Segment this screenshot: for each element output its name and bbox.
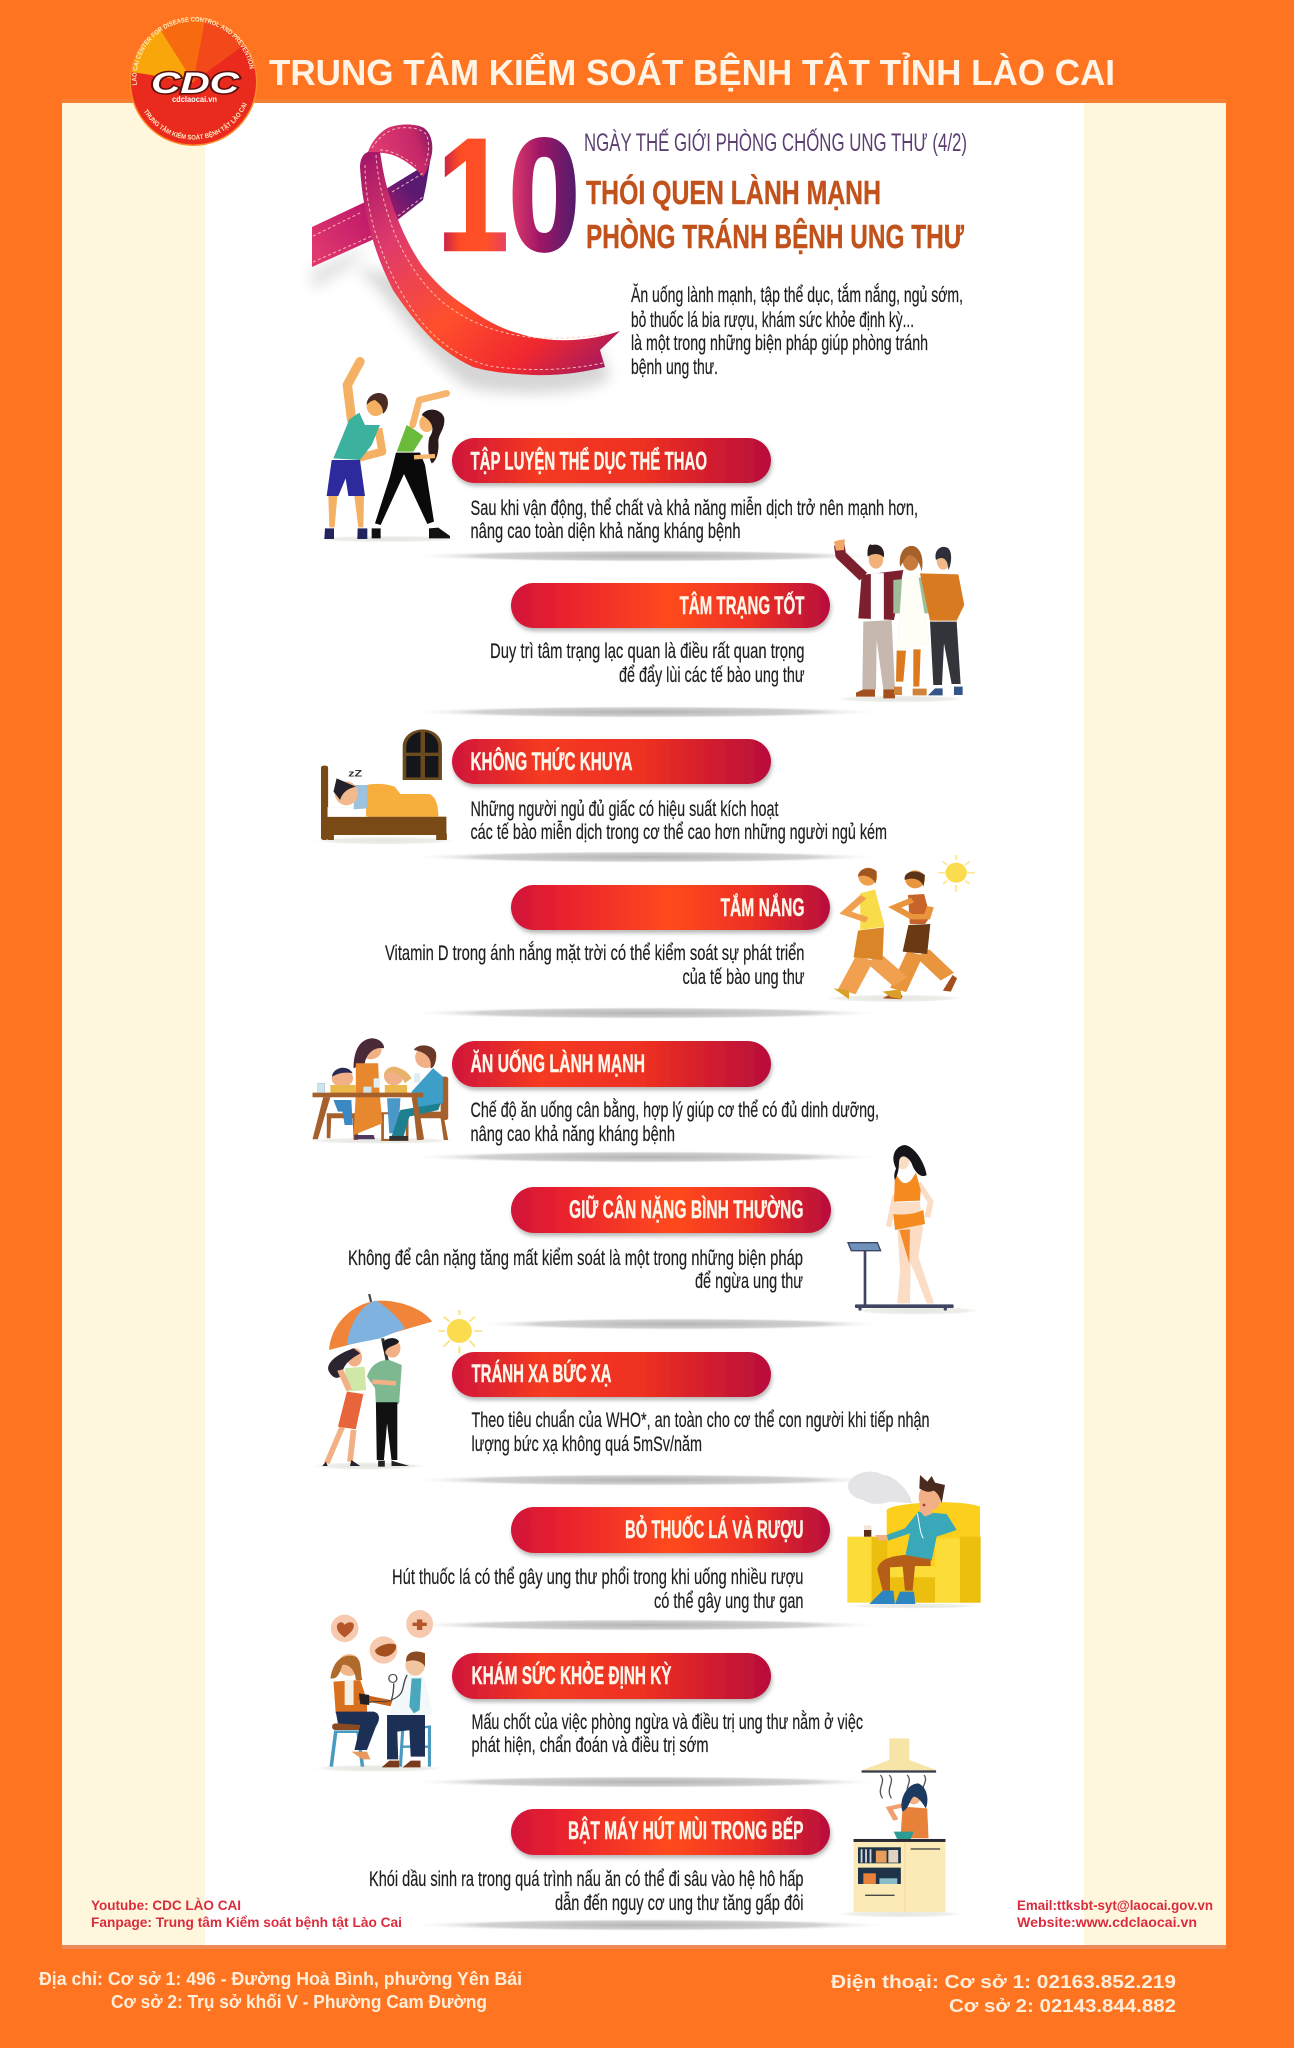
pill heading: BỎ THUỐC LÁ VÀ RƯỢU: [625, 1514, 804, 1544]
pill heading: [511, 1507, 830, 1553]
pill heading: BẬT MÁY HÚT MÙI TRONG BẾP: [568, 1815, 804, 1845]
body text: của tế bào ung thư: [682, 966, 804, 989]
pill heading: [452, 739, 771, 784]
panel: habit 8 quit smoking and alcohol: [392, 1472, 983, 1613]
body text: nâng cao khả năng kháng bệnh: [470, 1123, 675, 1146]
body text: dẫn đến nguy cơ ung thư tăng gấp đôi: [555, 1892, 804, 1915]
body text: Duy trì tâm trạng lạc quan là điều rất quan trọng: [490, 640, 804, 663]
body text: các tế bào miễn dịch trong cơ thể cao hơn những người ngủ kém: [470, 821, 887, 844]
icon: pink ribbon: [312, 124, 620, 393]
illustration: doctor and patient: [309, 1610, 447, 1772]
body text: Vitamin D trong ánh nắng mặt trời có thể kiểm soát sự phát triển: [385, 942, 804, 965]
logo: CDC seal: [130, 16, 258, 146]
illustration: three friends: [830, 539, 970, 703]
footer: address: [39, 1969, 522, 2012]
body text: phát hiện, chẩn đoán và điều trị sớm: [472, 1734, 708, 1757]
pill heading: [452, 1352, 771, 1397]
pill heading: [511, 583, 830, 628]
contact: email and website: [1017, 1898, 1213, 1930]
panel: habit 6 normal weight: [348, 1145, 985, 1315]
body text: Chế độ ăn uống cân bằng, hợp lý giúp cơ thể có đủ dinh dưỡng,: [470, 1099, 879, 1122]
contact: social links: [91, 1898, 402, 1930]
intro text: là một trong những biện pháp giúp phòng tránh: [631, 332, 928, 355]
pill heading: [511, 1187, 831, 1233]
footer: address: Địa chỉ: Cơ sở 1: 496 - Đường Hoà Bình, phường Yên Bái: [39, 1969, 522, 1989]
illustration: couple under umbrella with sun: [309, 1294, 482, 1470]
contact: email and website: Email:ttksbt-syt@laocai.gov.vn: [1017, 1898, 1213, 1913]
body text: Sau khi vận động, thể chất và khả năng miễn dịch trở nên mạnh hơn,: [470, 497, 918, 520]
illustration: family at table: [302, 1038, 458, 1144]
body text: lượng bức xạ không quá 5mSv/năm: [472, 1433, 702, 1456]
body text: nâng cao toàn diện khả năng kháng bệnh: [470, 520, 740, 543]
illustration: man smoking in armchair: [843, 1472, 983, 1609]
footer: address: Cơ sở 2: Trụ sở khối V - Phường Cam Đường: [111, 1992, 487, 2012]
pill heading: GIỮ CÂN NẶNG BÌNH THƯỜNG: [569, 1194, 804, 1224]
body text: Không để cân nặng tăng mất kiểm soát là một trong những biện pháp: [348, 1247, 803, 1270]
panel: habit 3 no late nights: [309, 729, 887, 845]
body text: để ngừa ung thư: [695, 1270, 803, 1293]
pill heading: ĂN UỐNG LÀNH MẠNH: [470, 1048, 645, 1078]
intro text: Ăn uống lành mạnh, tập thể dục, tắm nắng, ngủ sớm,: [631, 284, 963, 307]
logo: CDC seal: LAO CAI CENTER FOR DISEASE CONTROL AND PREVENTION: [132, 16, 254, 86]
illustration: sleeping in bed: [309, 729, 461, 845]
pill heading: TRÁNH XA BỨC XẠ: [472, 1358, 612, 1388]
body text: [348, 1247, 803, 1293]
pill heading: TÂM TRẠNG TỐT: [680, 590, 804, 620]
illustration: woman on scale: [848, 1145, 985, 1315]
body text: [472, 1711, 863, 1757]
illustration: woman cooking under hood: [833, 1738, 967, 1918]
pill heading: [511, 885, 830, 930]
body text: [369, 1868, 804, 1915]
footer: phone: [831, 1972, 1176, 2016]
body text: [490, 640, 804, 687]
logo: CDC seal: CDC: [151, 67, 241, 100]
footer: phone: Cơ sở 2: 02143.844.882: [949, 1996, 1176, 2016]
header title: TRUNG TÂM KIỂM SOÁT BỆNH TẬT TỈNH LÀO CAI: [269, 51, 1115, 93]
panel: habit 7 avoid radiation: [309, 1294, 930, 1470]
heading: date line: NGÀY THẾ GIỚI PHÒNG CHỐNG UNG THƯ (4/2): [584, 127, 967, 157]
pill heading: [452, 1041, 771, 1087]
contact: social links: Youtube: CDC LÀO CAI: [91, 1898, 241, 1913]
body text: có thể gây ung thư gan: [654, 1590, 804, 1613]
body text: [470, 798, 887, 844]
pill heading: TẮM NẮNG: [720, 892, 804, 922]
body text: [385, 942, 804, 989]
body text: Mấu chốt của việc phòng ngừa và điều trị ung thư nằm ở việc: [472, 1711, 863, 1734]
panel: habit 4 sunbathing: [385, 855, 975, 1002]
pill heading: [452, 438, 771, 483]
body text: để đẩy lùi các tế bào ung thư: [619, 664, 804, 687]
panel: white content: [205, 103, 1084, 1945]
pill heading: [511, 1809, 830, 1855]
body text: Khói dầu sinh ra trong quá trình nấu ăn có thể đi sâu vào hệ hô hấp: [369, 1868, 804, 1891]
heading: main title: THÓI QUEN LÀNH MẠNH: [586, 174, 881, 211]
pill heading: KHÔNG THỨC KHUYA: [470, 746, 632, 776]
intro text: [631, 284, 963, 379]
pill heading: [452, 1653, 771, 1699]
intro text: bỏ thuốc lá bia rượu, khám sức khỏe định kỳ...: [631, 309, 914, 332]
panel: habit 2 good mood: [490, 539, 970, 703]
footer: phone: Điện thoại: Cơ sở 1: 02163.852.219: [831, 1972, 1176, 1992]
body text: Hút thuốc lá có thể gây ung thư phổi trong khi uống nhiều rượu: [392, 1566, 804, 1589]
body text: [392, 1566, 804, 1613]
panel: habit 9 regular check-ups: [309, 1610, 863, 1772]
heading: main title: [586, 174, 964, 255]
pill heading: KHÁM SỨC KHỎE ĐỊNH KỲ: [472, 1660, 672, 1690]
contact: email and website: Website:www.cdclaocai.vn: [1017, 1915, 1197, 1930]
body text: Những người ngủ đủ giấc có hiệu suất kích hoạt: [470, 798, 779, 821]
intro text: bệnh ung thư.: [631, 356, 718, 379]
body text: [470, 497, 918, 543]
logo: CDC seal: TRUNG TÂM KIỂM SOÁT BỆNH TẬT LÀO CAI: [144, 102, 247, 140]
heading: main title: PHÒNG TRÁNH BỆNH UNG THƯ: [586, 218, 964, 255]
panel: habit 5 healthy eating: [302, 1038, 879, 1146]
number 10: 10: [437, 105, 580, 284]
body text: [470, 1099, 879, 1146]
body text: [472, 1409, 930, 1456]
logo: CDC seal: cdclaocai.vn: [172, 95, 217, 104]
illustration: sleeping in bed: zZ: [348, 769, 362, 779]
panel: habit 10 kitchen hood: [369, 1738, 967, 1918]
illustration: couple exercising: [310, 362, 467, 542]
pill heading: TẬP LUYỆN THỂ DỤC THỂ THAO: [470, 446, 707, 476]
illustration: two runners and sun: [820, 855, 975, 1002]
body text: Theo tiêu chuẩn của WHO*, an toàn cho cơ thể con người khi tiếp nhận: [472, 1409, 930, 1432]
panel: habit 1 exercise: [310, 362, 918, 543]
contact: social links: Fanpage: Trung tâm Kiểm soát bệnh tật Lào Cai: [91, 1915, 402, 1930]
